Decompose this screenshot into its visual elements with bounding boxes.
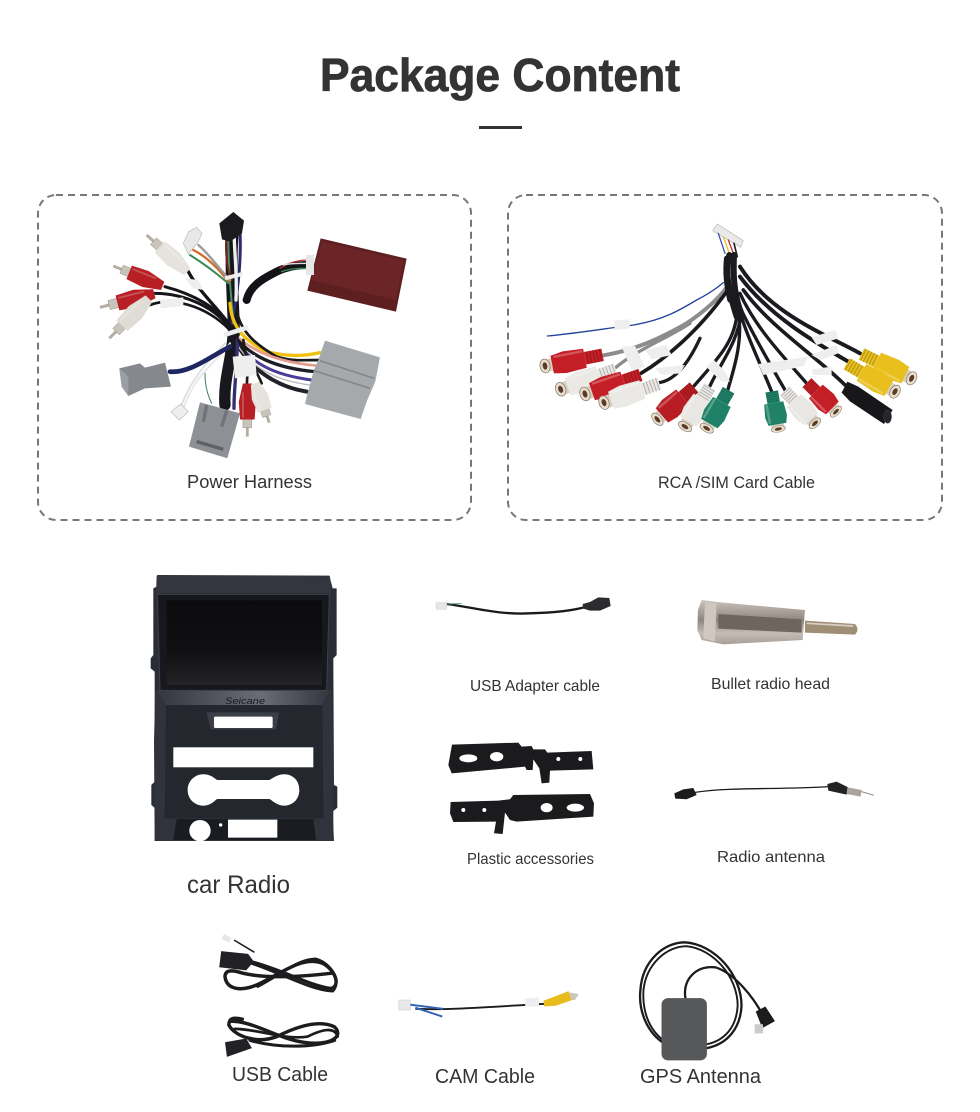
black aux jack (842, 382, 893, 424)
small white connector (183, 227, 202, 254)
gray plug bottom (189, 402, 240, 458)
image: coiled usb cables (219, 934, 338, 1057)
vent slot (207, 712, 279, 729)
caption: radio antenna: Radio antenna (717, 849, 825, 866)
top black connector (219, 212, 244, 242)
image: power harness cables (98, 212, 407, 458)
caption: usb cable: USB Cable (232, 1064, 328, 1086)
image: mounting brackets (448, 743, 594, 834)
main bundle (232, 233, 234, 333)
rca plugs (141, 228, 193, 278)
cable ties (224, 327, 248, 335)
image: rca cable fan (538, 224, 921, 437)
caption: power harness: Power Harness (187, 472, 312, 492)
red interface box (307, 238, 407, 312)
image: adapter cable (436, 597, 611, 614)
caption: rca sim card cable: RCA /SIM Card Cable (658, 473, 815, 492)
car radio (151, 575, 337, 899)
rca leads (188, 272, 233, 330)
usb adapter cable (436, 597, 611, 695)
radio antenna (674, 782, 874, 866)
gray leads (603, 288, 726, 355)
caption: bullet radio head: Bullet radio head (711, 676, 830, 693)
climate cut-out (173, 747, 313, 767)
image: gps puck and cable (640, 942, 775, 1060)
caption: cam cable: CAM Cable (435, 1066, 535, 1088)
control cut-out (188, 774, 299, 806)
image: camera cable (399, 991, 579, 1017)
labels (160, 297, 183, 308)
panel: rca sim card cable (508, 195, 942, 520)
box leads (247, 265, 308, 300)
cam cable (399, 991, 579, 1088)
caption: gps antenna: GPS Antenna (640, 1066, 762, 1088)
caption: car radio: car Radio (187, 871, 290, 899)
small white terminal (171, 404, 188, 420)
gray plug right (305, 341, 380, 419)
rca sockets (538, 344, 605, 378)
caption: plastic accessories: Plastic accessories (467, 851, 594, 868)
multi-pin connector (713, 224, 743, 247)
image: radio panel (151, 575, 337, 841)
plastic accessories (448, 743, 594, 868)
panel: power harness (38, 195, 471, 520)
gps antenna (640, 942, 775, 1088)
caption: usb adapter cable: USB Adapter cable (470, 678, 600, 695)
image: antenna lead (674, 782, 874, 799)
gray plug left (119, 363, 171, 396)
bottom bundle (225, 333, 233, 405)
white connector leads (193, 250, 228, 282)
image: metal adapter (697, 600, 857, 644)
bullet radio head (697, 600, 857, 693)
lower recess (173, 819, 316, 840)
thin blue (547, 283, 723, 336)
title: Package Content (320, 49, 680, 101)
brand name: Seicane (225, 696, 265, 706)
screen (157, 594, 329, 690)
black leads (641, 292, 727, 373)
usb cable (219, 934, 338, 1086)
wire tags (614, 319, 630, 330)
